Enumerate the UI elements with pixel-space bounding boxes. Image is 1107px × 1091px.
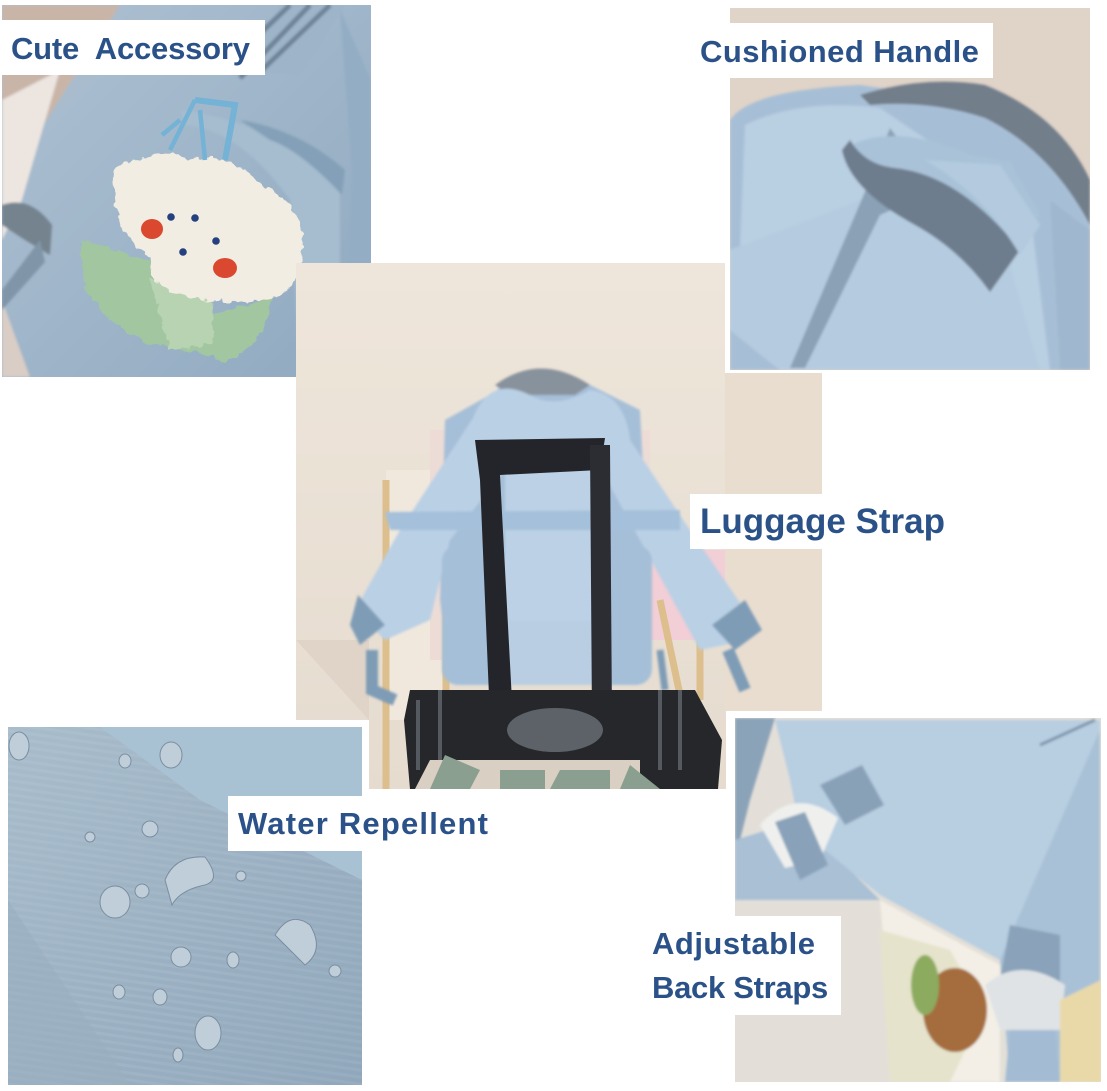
photo panel: cushioned handle [730, 8, 1090, 370]
photo panel: water repellent [8, 727, 362, 1085]
backpack [350, 368, 762, 700]
label: cute accessory: Cute Accessory [11, 31, 250, 66]
icon: plush keychain [80, 100, 303, 362]
photo panel: adjustable back straps [735, 718, 1101, 1082]
label: cute accessory [0, 20, 265, 75]
luggage handle [404, 438, 722, 789]
label: luggage strap [690, 494, 945, 549]
label: adjustable back straps: Adjustable [652, 926, 815, 961]
label: cushioned handle [690, 23, 993, 78]
label: adjustable back straps: Back Straps [652, 970, 828, 1005]
label: water repellent: Water Repellent [238, 806, 489, 841]
water droplets [9, 732, 341, 1062]
photo panel: luggage strap [296, 263, 822, 790]
label: adjustable back straps [643, 916, 841, 1015]
label: luggage strap: Luggage Strap [700, 502, 945, 541]
label: water repellent [228, 796, 490, 851]
label: cushioned handle: Cushioned Handle [700, 34, 979, 69]
photo panel: cute accessory [2, 5, 371, 378]
